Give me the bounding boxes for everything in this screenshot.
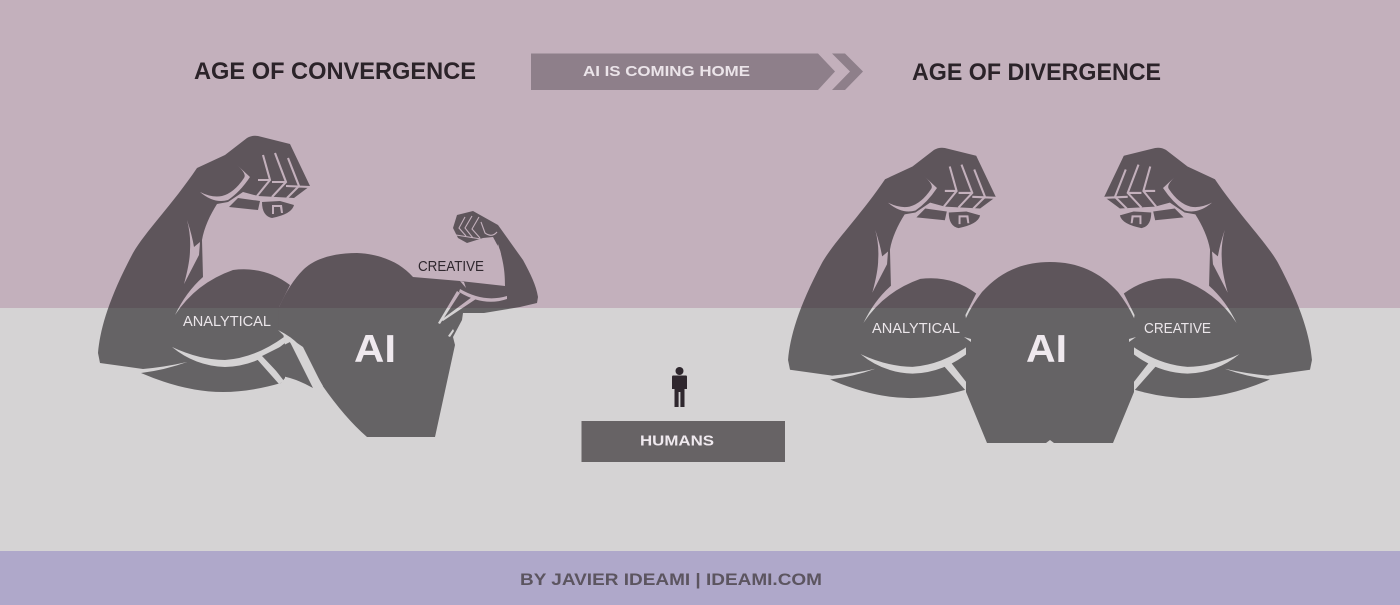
label: analytical: ANALYTICAL [183, 314, 271, 330]
heading: age of divergence: AGE OF DIVERGENCE [912, 59, 1161, 86]
heading: age of convergence: AGE OF CONVERGENCE [194, 58, 476, 85]
figure: convergence body with one large and one small arm [98, 136, 538, 437]
label: AI: AI [1026, 328, 1067, 371]
footer band [0, 551, 1400, 605]
panel: upper background band [0, 0, 1400, 308]
platform [582, 421, 785, 462]
figure: humans on a platform [582, 367, 785, 462]
silhouette: two arms and torso [788, 148, 1312, 443]
icon: person [672, 367, 687, 407]
highlight: small ticks beside torso [964, 337, 1136, 342]
arrow: AI is coming home: AI IS COMING HOME [583, 63, 750, 80]
panel: lower background band [0, 308, 1400, 551]
silhouette: large analytical arm, torso and small creative arm [98, 136, 538, 437]
footer credit: BY JAVIER IDEAMI | IDEAMI.COM [520, 571, 822, 589]
label: creative: CREATIVE [418, 259, 484, 275]
arrow: AI is coming home [531, 54, 863, 90]
highlight: muscle stripes on torso and small arm [278, 216, 507, 388]
figure: divergence body with two large arms [788, 148, 1312, 443]
label: analytical: ANALYTICAL [872, 321, 960, 337]
label: humans: HUMANS [640, 432, 714, 450]
label: creative: CREATIVE [1144, 321, 1211, 337]
label: AI: AI [354, 328, 396, 371]
